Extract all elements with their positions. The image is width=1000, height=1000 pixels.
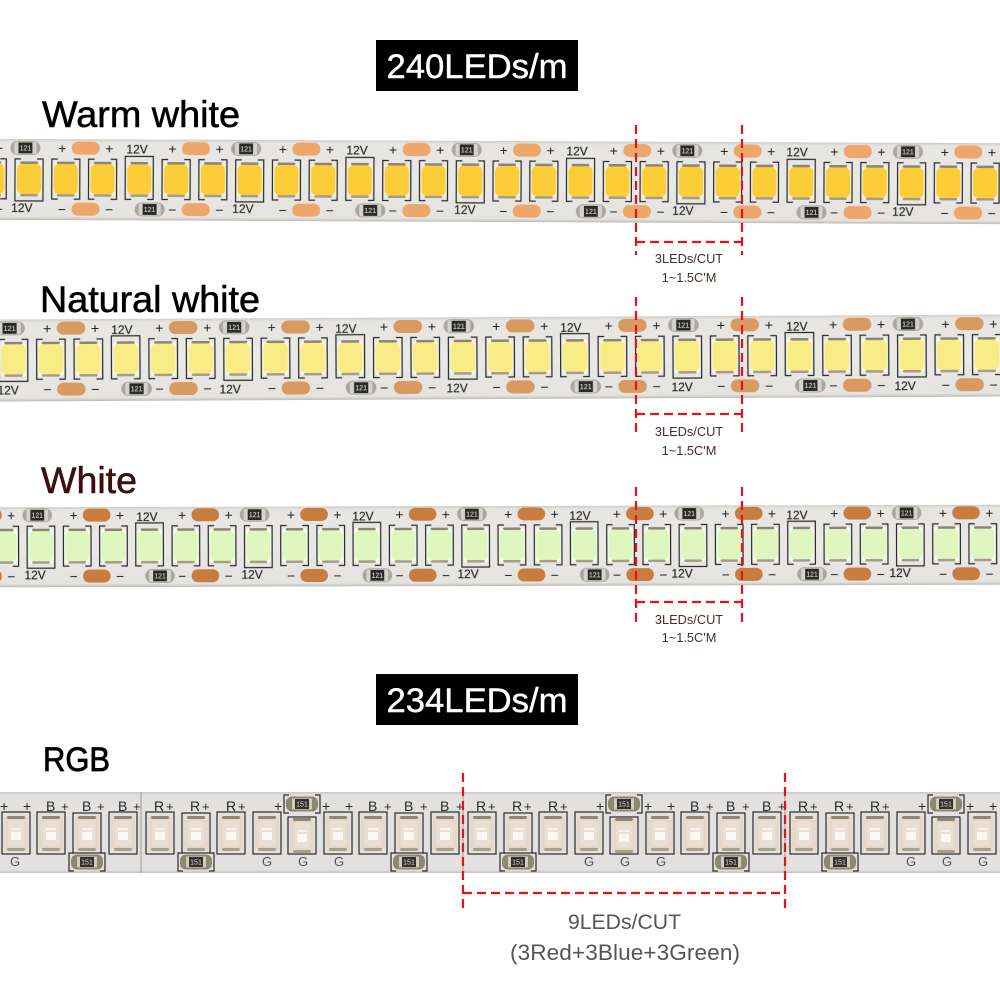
LED strip: warm white bbox=[0, 138, 1000, 225]
LED strip: RGB: RRRRRRRRR bbox=[154, 798, 880, 814]
heading: 234LEDs/m bbox=[376, 674, 578, 725]
cut marker: natural white: 3LEDs/CUT bbox=[655, 424, 723, 439]
LED strip: natural white: 12V bbox=[560, 321, 582, 335]
cut marker: natural white: 1~1.5C'M bbox=[662, 443, 716, 458]
LED strip: warm white: 12V bbox=[11, 201, 33, 215]
LED strip: natural white bbox=[0, 314, 1000, 403]
LED strip: RGB: BBBBBBBBB bbox=[46, 798, 771, 814]
cut marker: warm white: 3LEDs/CUT bbox=[655, 251, 723, 266]
cut marker: warm white: 1~1.5C'M bbox=[662, 270, 716, 285]
LED strip: RGB: ++++++++++++++++++ bbox=[61, 799, 890, 814]
LED strip: warm white: 12V bbox=[454, 203, 476, 217]
heading: 234LEDs/m: 234LEDs/m bbox=[386, 682, 568, 720]
LED strip: white: 12V bbox=[457, 567, 479, 581]
LED strip: warm white: 12V bbox=[126, 142, 148, 156]
cut marker: white: 3LEDs/CUT bbox=[655, 612, 723, 627]
cut marker: warm white bbox=[636, 125, 742, 285]
LED strip: warm white: 12V bbox=[892, 205, 914, 219]
LED strip: RGB: GGGGGGGGGG bbox=[10, 854, 988, 869]
LED strip: natural white: 12V bbox=[671, 380, 693, 394]
LED strip: RGB: +++++++++++ bbox=[0, 798, 997, 814]
cut marker: RGB bbox=[463, 773, 785, 965]
LED strip: warm white: 12V bbox=[672, 204, 694, 218]
LED strip: RGB bbox=[0, 792, 1000, 873]
LED strip: white: 12V bbox=[889, 566, 911, 580]
LED strip: natural white: 12V bbox=[786, 319, 808, 334]
heading: 240LEDs/m bbox=[376, 40, 578, 91]
LED strip: warm white: 12V bbox=[566, 144, 588, 158]
LED strip: natural white: 12V bbox=[335, 322, 357, 336]
LED strip: white: 12V bbox=[241, 568, 263, 582]
LED strip: warm white: 12V bbox=[232, 202, 254, 216]
LED strip: white: 12V bbox=[671, 566, 693, 581]
LED strip: white bbox=[0, 504, 1000, 588]
LED strip: white: 12V bbox=[136, 510, 158, 524]
LED strip: white: 12V bbox=[786, 508, 808, 522]
LED strip: white: 12V bbox=[569, 509, 591, 523]
heading: 240LEDs/m: 240LEDs/m bbox=[386, 48, 568, 86]
cut marker: RGB: 9LEDs/CUT bbox=[568, 911, 681, 934]
LED strip: white: 12V bbox=[24, 568, 46, 582]
cut marker: white: 1~1.5C'M bbox=[662, 630, 716, 645]
label: RGB: RGB bbox=[43, 741, 110, 779]
LED strip: white: 12V bbox=[352, 509, 374, 523]
LED strip: natural white: 12V bbox=[446, 381, 468, 395]
LED strip: natural white: 12V bbox=[894, 379, 916, 393]
cut marker: natural white bbox=[636, 297, 742, 458]
LED strip: natural white: 12V bbox=[111, 323, 133, 337]
cut marker: RGB: (3Red+3Blue+3Green) bbox=[510, 940, 740, 965]
LED strip: warm white: 12V bbox=[786, 145, 808, 159]
label: Warm white: Warm white bbox=[42, 94, 240, 135]
LED strip: natural white: 12V bbox=[219, 382, 241, 396]
label: Natural white: Natural white bbox=[40, 279, 260, 320]
cut marker: white bbox=[636, 487, 742, 645]
label: White: White bbox=[41, 460, 137, 501]
LED strip: warm white: 12V bbox=[346, 143, 368, 157]
